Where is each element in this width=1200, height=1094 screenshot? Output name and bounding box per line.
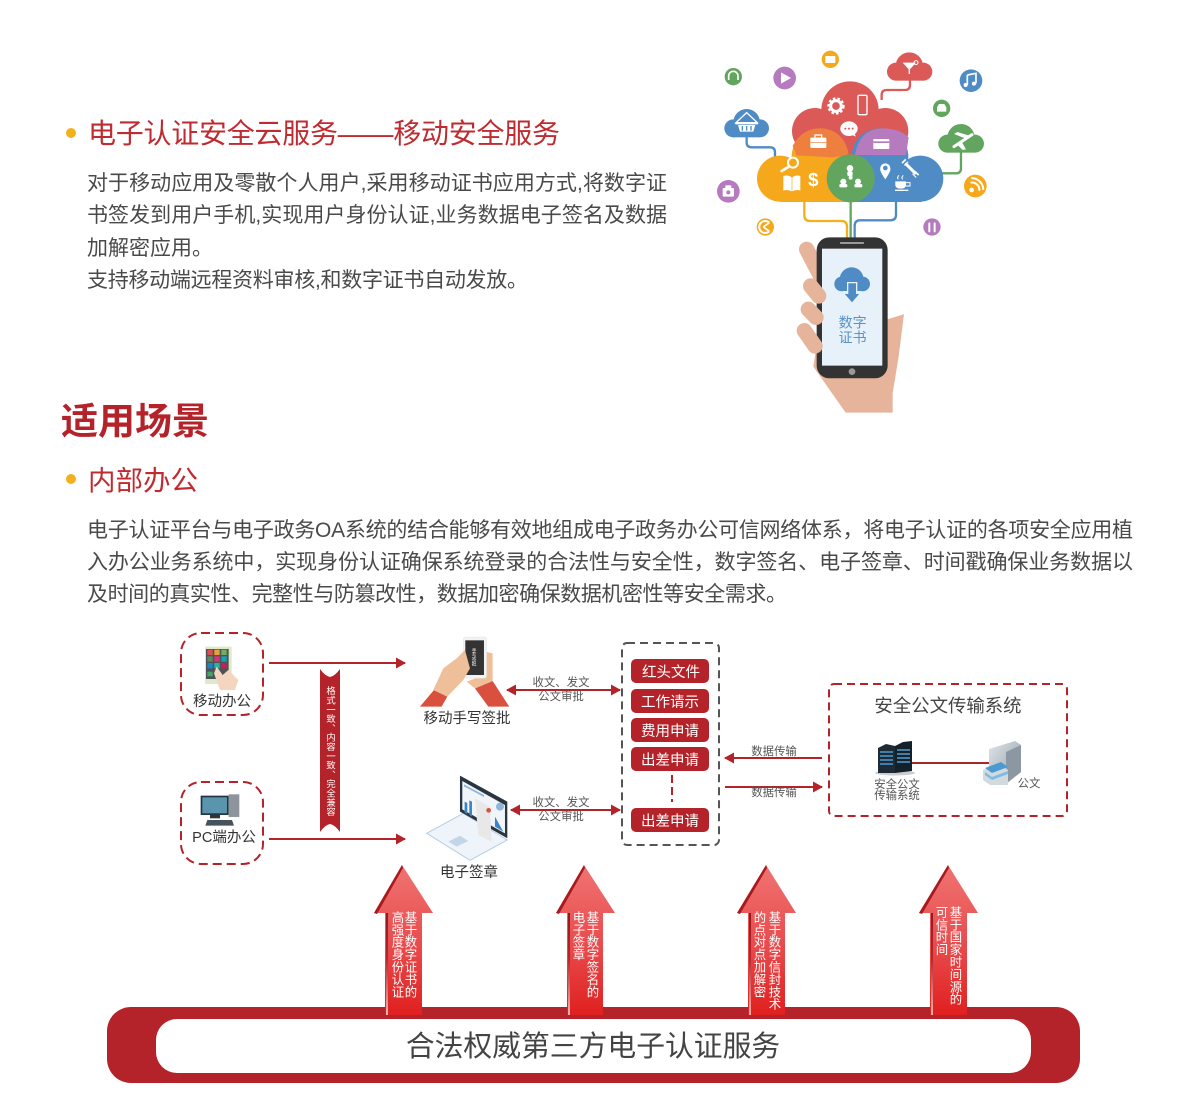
text block: mobile security description: 书签发到用户手机,实现用户身份认证,业务数据电子签名及数据 <box>87 204 667 227</box>
floating icons <box>717 51 987 236</box>
arrow: top document exchange <box>507 675 620 703</box>
label: PC office: PC端办公 <box>192 829 256 846</box>
panel: secure document transfer system <box>829 684 1067 816</box>
label: system: 安全公文 <box>874 777 920 791</box>
icon: file cabinet <box>983 741 1021 785</box>
panel: document types <box>622 643 719 845</box>
panel: PC office <box>181 782 263 864</box>
label: mobile office: 移动办公 <box>193 693 251 710</box>
ribbon: format consistency: 格式一致、内容一致、完全兼容 <box>325 685 336 817</box>
connectors <box>747 78 961 238</box>
arrow: data in <box>725 744 822 758</box>
icon: desktop computer <box>201 794 239 826</box>
panel: mobile office <box>181 633 263 715</box>
button: work request <box>631 689 709 713</box>
button: travel request <box>631 747 709 771</box>
red cloud <box>792 81 908 160</box>
phone: 数字 <box>839 314 867 330</box>
ribbon: format consistency <box>320 669 340 832</box>
heading: mobile security service: 电子认证安全云服务——移动安全服务 <box>88 118 560 149</box>
arrow: digital signature: 电子签章 <box>571 911 585 961</box>
arrow: identity authentication <box>374 865 433 1015</box>
arrow: trusted time: 基于国家时间源的 <box>948 906 962 1005</box>
arrow: identity authentication: 基于数字证书的 <box>403 911 417 998</box>
button: expense request <box>631 718 709 742</box>
icon: laptop with signature <box>427 776 507 860</box>
text block: internal office description: 及时间的真实性、完整性与防篡改性，数据加密确保数据机密性等安全需求。 <box>87 583 787 606</box>
small cloud: martini <box>887 52 932 81</box>
arrow: envelope encryption: 的点对点加解密 <box>752 910 766 998</box>
phone <box>817 237 888 378</box>
text block: mobile security description: 对于移动应用及零散个人用户,采用移动证书应用方式,将数字证 <box>87 172 667 195</box>
button: travel request lower <box>631 808 709 832</box>
icon: servers <box>875 741 915 776</box>
phone: 证书 <box>839 330 867 346</box>
icon: handwriting on phone <box>420 637 509 707</box>
label: mobile handwriting approval: 移动手写签批 <box>424 710 510 727</box>
arrow: trusted time <box>919 865 978 1015</box>
blue cloud <box>850 128 943 202</box>
bullet: cloud service heading <box>66 128 76 138</box>
button: work request: 工作请示 <box>641 694 699 711</box>
arrow: data in: 数据传输 <box>751 744 797 758</box>
text block: internal office description <box>87 519 1133 606</box>
arrow: data out: 数据传输 <box>751 785 797 799</box>
arrow: envelope encryption: 基于数字信封技术 <box>767 911 781 1010</box>
overlaps <box>793 128 849 157</box>
arrow: bottom document exchange <box>511 795 620 823</box>
heading: internal office: 内部办公 <box>88 465 198 496</box>
cloud glyph icons <box>782 95 917 191</box>
hand <box>813 314 904 413</box>
icon: tablet with hand <box>205 647 238 690</box>
button: travel request lower: 出差申请 <box>641 813 699 830</box>
label: document: 公文 <box>1018 776 1041 790</box>
base label: 合法权威第三方电子认证服务 <box>406 1031 780 1063</box>
arrow: PC office to signature <box>269 838 405 840</box>
orange cloud <box>757 128 852 202</box>
icon: handwriting on phone: 手写签批 <box>471 647 477 668</box>
button: red-head document: 红头文件 <box>642 664 700 681</box>
label: electronic signature: 电子签章 <box>440 863 498 881</box>
arrow: mobile office to handwriting <box>269 662 405 664</box>
arrow: data out <box>725 785 822 799</box>
label: system <box>874 777 920 802</box>
arrow: top document exchange: 公文审批 <box>538 689 584 703</box>
text block: internal office description: 入办公业务系统中，实现身份认证确保系统登录的合法性与安全性，数字签名、电子签章、时间戳确保业务数据以 <box>87 551 1133 574</box>
base bar: third party service <box>107 1007 1080 1083</box>
button: expense request: 费用申请 <box>641 723 699 740</box>
arrow: bottom document exchange: 公文审批 <box>538 809 584 823</box>
text block: mobile security description: 支持移动端远程资料审核,和数字证书自动发放。 <box>87 269 528 292</box>
arrow: trusted time: 可信时间 <box>934 906 948 956</box>
green centre circle <box>827 154 875 202</box>
arrow: bottom document exchange: 收文、发文 <box>533 795 590 809</box>
cloud glyph icons: $ <box>808 169 819 190</box>
text block: mobile security description <box>87 172 667 292</box>
arrow: envelope encryption <box>737 865 796 1015</box>
panel heading: 安全公文传输系统 <box>874 695 1022 716</box>
button: red-head document <box>631 659 709 683</box>
bullet: internal office <box>66 474 76 484</box>
text block: internal office description: 电子认证平台与电子政务OA系统的结合能够有效地组成电子政务办公可信网络体系，将电子认证的各项安全应用植 <box>87 519 1133 542</box>
arrow: digital signature: 基于数字签名的 <box>585 911 599 998</box>
heading: application scenarios: 适用场景 <box>61 401 209 442</box>
illustration: cloud services and phone <box>717 51 987 413</box>
arrow: identity authentication: 高强度身份认证 <box>390 910 404 998</box>
small cloud: basket <box>724 109 769 137</box>
arrow: digital signature <box>556 865 615 1015</box>
button: travel request: 出差申请 <box>641 752 699 769</box>
text block: mobile security description: 加解密应用。 <box>87 237 213 260</box>
arrow: top document exchange: 收文、发文 <box>533 675 590 689</box>
small cloud: plane <box>938 124 984 153</box>
fingers in front of phone <box>804 286 819 346</box>
label: system: 传输系统 <box>874 788 920 802</box>
